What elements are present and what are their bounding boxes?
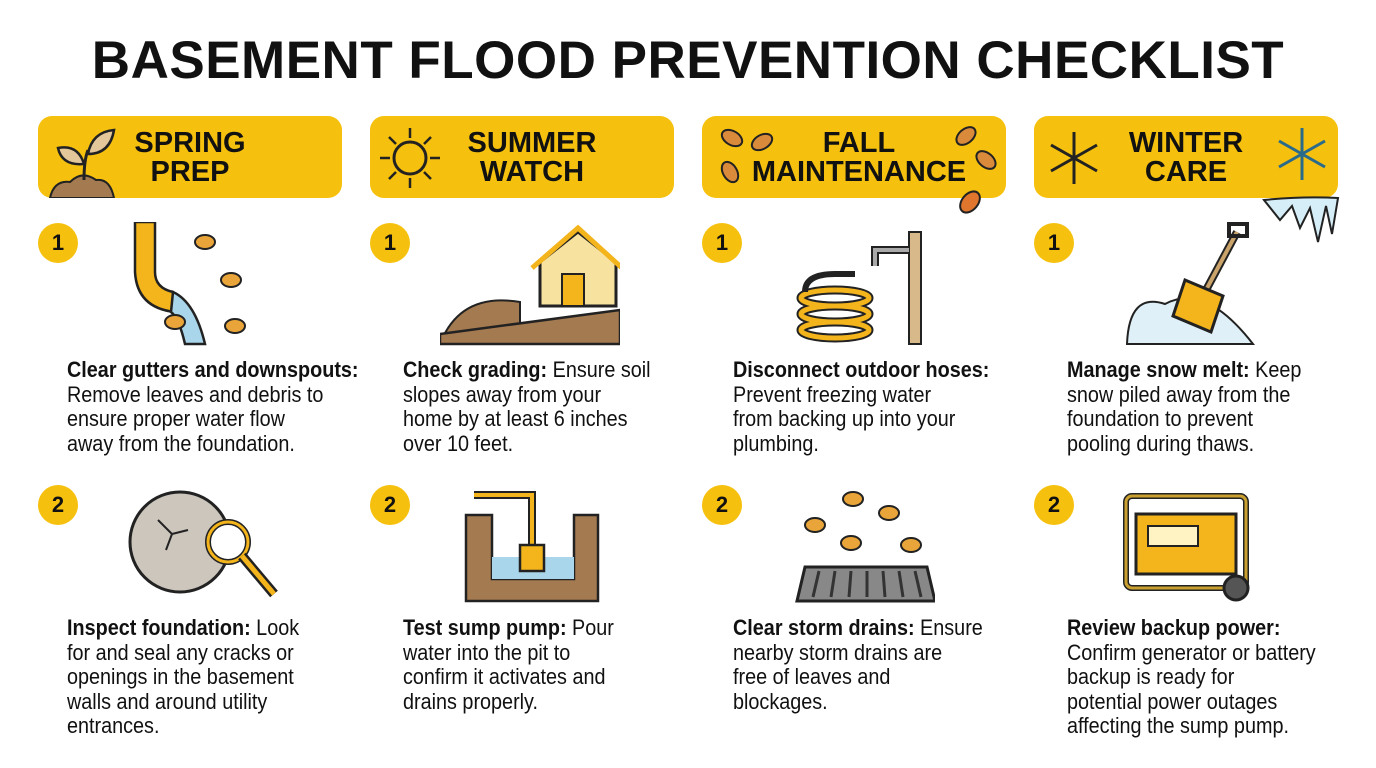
text: manage snow melt: Manage snow melt: Keep	[1067, 357, 1301, 382]
text: clear storm drains: nearby storm drains are	[733, 640, 942, 664]
text: 1	[384, 230, 396, 255]
text: inspect foundation: Inspect foundation: Look	[67, 615, 299, 640]
icon: downspout	[134, 222, 246, 346]
text: 2	[716, 492, 728, 517]
text: disconnect hoses: Disconnect outdoor hoses:	[733, 357, 989, 382]
text: test sump pump: Test sump pump: Pour	[403, 615, 614, 640]
panel: summer header: SUMMER	[468, 127, 596, 159]
step: fall 1	[702, 223, 989, 456]
text: check grading: home by at least 6 inches	[403, 406, 628, 431]
text: 1	[52, 230, 64, 255]
step: summer 1	[370, 223, 651, 456]
text: inspect foundation: openings in the basement	[67, 664, 294, 689]
text: disconnect hoses: from backing up into your	[733, 406, 955, 431]
text: clear gutters: ensure proper water flow	[67, 406, 285, 431]
text: clear gutters: Clear gutters and downspouts:	[67, 357, 359, 382]
text: test sump pump	[403, 615, 614, 714]
text: check grading: Check grading: Ensure soil	[403, 357, 651, 382]
text: review backup power: affecting the sump pump.	[1067, 713, 1289, 738]
text: manage snow melt: snow piled away from the	[1067, 382, 1290, 406]
text: clear gutters	[67, 357, 359, 456]
text: 2	[384, 492, 396, 517]
text: inspect foundation: for and seal any cracks or	[67, 640, 294, 664]
text: test sump pump: confirm it activates and	[403, 664, 605, 689]
title: BASEMENT FLOOD PREVENTION CHECKLIST	[92, 31, 1284, 90]
panel: fall header	[702, 116, 1006, 198]
step: winter 1	[1034, 222, 1301, 456]
text: check grading: slopes away from your	[403, 382, 601, 406]
text: test sump pump: drains properly.	[403, 688, 538, 714]
text: clear gutters: Remove leaves and debris to	[67, 382, 323, 406]
panel: winter header: CARE	[1145, 156, 1227, 188]
text: inspect foundation: entrances.	[67, 713, 159, 738]
text: 1	[1048, 230, 1060, 255]
text: review backup power: Confirm generator or battery	[1067, 640, 1316, 664]
panel: summer header: WATCH	[480, 156, 584, 188]
text: disconnect hoses: plumbing.	[733, 430, 819, 456]
text: review backup power	[1067, 615, 1316, 738]
panel: spring header: SPRING	[134, 127, 246, 159]
panel: winter header	[1034, 116, 1338, 198]
text: check grading: over 10 feet.	[403, 430, 513, 456]
step: winter 2	[1034, 485, 1316, 738]
panel: summer header	[370, 116, 674, 198]
step: spring 2	[38, 485, 300, 738]
text: check grading	[403, 357, 651, 456]
text: inspect foundation: walls and around utility	[67, 688, 267, 714]
text: review backup power: potential power outages	[1067, 688, 1277, 714]
text: inspect foundation	[67, 615, 300, 738]
text: clear storm drains	[733, 615, 983, 714]
text: disconnect hoses	[733, 357, 989, 456]
text: manage snow melt: pooling during thaws.	[1067, 430, 1254, 456]
text: manage snow melt	[1067, 357, 1301, 456]
panel: spring header: PREP	[150, 156, 229, 188]
panel: fall header: FALL	[823, 127, 895, 159]
text: clear storm drains: Clear storm drains: Ensure	[733, 615, 983, 640]
text: 2	[52, 492, 64, 517]
text: clear storm drains: blockages.	[733, 688, 828, 714]
icon: foundation crack magnifier	[128, 490, 278, 598]
icon: storm drain	[795, 491, 935, 602]
text: review backup power: backup is ready for	[1067, 664, 1234, 689]
icon: sprout	[49, 128, 116, 198]
step: fall 2	[702, 485, 983, 714]
text: test sump pump: water into the pit to	[403, 640, 570, 664]
icon: snow shovel	[1126, 222, 1255, 345]
panel: winter header: WINTER	[1129, 127, 1243, 159]
step: spring 1	[38, 222, 359, 456]
text: clear gutters: away from the foundation.	[67, 430, 295, 456]
text: manage snow melt: foundation to prevent	[1067, 406, 1253, 431]
icon: sun	[380, 128, 440, 188]
text: clear storm drains: free of leaves and	[733, 664, 890, 689]
icon: leaves	[720, 126, 997, 214]
text: review backup power: Review backup power:	[1067, 615, 1280, 640]
panel: fall header: MAINTENANCE	[752, 156, 966, 188]
text: 2	[1048, 492, 1060, 517]
text: disconnect hoses: Prevent freezing water	[733, 382, 931, 406]
step: summer 2	[370, 485, 614, 714]
icon: house grading	[440, 224, 620, 346]
icon: snowflakes	[1050, 128, 1340, 242]
text: 1	[716, 230, 728, 255]
icon: hose and faucet	[796, 231, 922, 345]
icon: sump pump	[464, 491, 600, 602]
icon: generator	[1123, 493, 1250, 602]
panel: spring header	[38, 116, 342, 198]
